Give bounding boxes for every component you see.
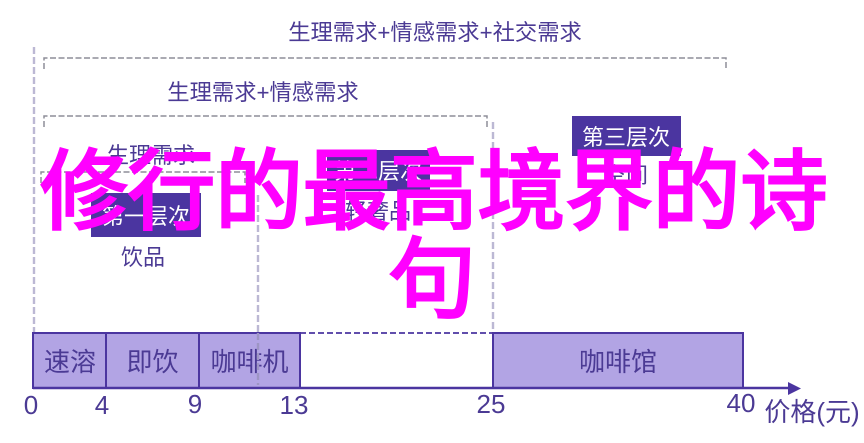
axis tick labels: 13: [280, 390, 308, 420]
bar segment: instant powder: [33, 333, 106, 388]
heading: level two needs: 生理需求+情感需求: [167, 80, 359, 105]
bar segment: coffee machine: 咖啡机: [210, 347, 289, 377]
vertical dashed guides: [34, 47, 493, 385]
bracket: level three range: [44, 58, 726, 69]
badge: level two: 第二层次: [334, 159, 422, 184]
label: space: 空间: [604, 163, 648, 188]
axis tick labels: [24, 388, 755, 420]
badge: level one: 第一层次: [102, 204, 190, 229]
bracket: level one range: [41, 172, 245, 183]
badge: level three: 第三层次: [582, 125, 670, 150]
bar segment: coffee shop: [493, 333, 743, 388]
bar segment: coffee shop: 咖啡馆: [579, 347, 657, 377]
dashed top edge of price gap: [300, 332, 493, 334]
label: drinks: 饮品: [121, 245, 165, 270]
price axis arrow: [33, 382, 801, 395]
badge: level two: [327, 150, 430, 191]
badge: level one: [91, 193, 201, 237]
bar segment: ready to drink: [106, 333, 199, 388]
title overlay: 修行的最高境界的诗: [40, 143, 828, 241]
axis tick labels: 40: [727, 388, 755, 418]
title overlay: [40, 143, 828, 329]
bracket: level two range: [44, 116, 487, 127]
overlay of machine guide on bar: [257, 333, 259, 385]
heading: level three needs: 生理需求+情感需求+社交需求: [288, 20, 582, 45]
axis tick labels: 25: [477, 389, 505, 419]
bar segment: coffee machine: [199, 333, 300, 388]
axis tick labels: 9: [188, 389, 202, 419]
bar segment: instant powder: 速溶: [44, 347, 96, 377]
axis tick labels: 0: [24, 390, 38, 420]
axis title: price (yuan): 价格(元): [764, 397, 860, 427]
axis tick labels: 4: [95, 390, 109, 420]
bar segment: ready to drink: 即饮: [126, 347, 179, 377]
title overlay: 句: [388, 231, 476, 329]
heading: level one needs: 生理需求: [107, 143, 195, 168]
label: light luxury: 轻奢品: [345, 199, 411, 224]
badge: level three: [572, 116, 681, 156]
